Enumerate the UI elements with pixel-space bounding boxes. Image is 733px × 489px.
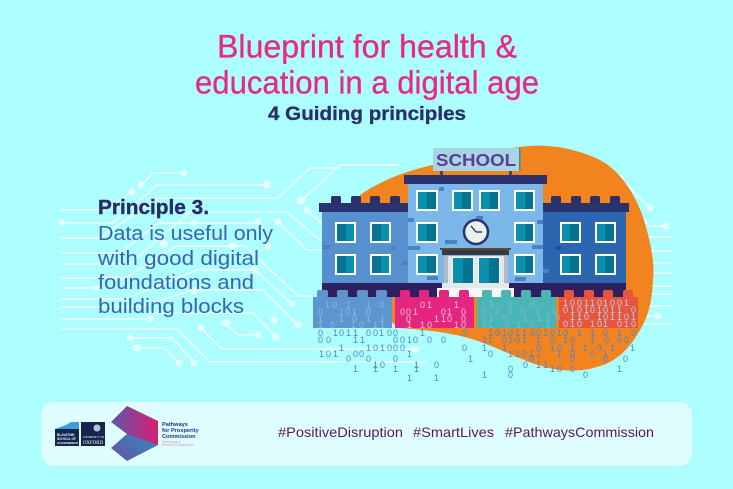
binary digits inside blocks: 110101101 — [570, 312, 636, 322]
principle text block: with good digital — [97, 248, 259, 270]
principle text block: Principle 3. — [98, 197, 209, 219]
logo: blavatnik school: GOVERNMENT — [57, 441, 79, 445]
binary digits inside blocks: 001010 — [400, 307, 466, 317]
logo: blavatnik school — [55, 422, 79, 446]
dark foundation — [322, 283, 626, 297]
school sign: SCHOOL — [436, 150, 516, 170]
logo: university of oxford — [81, 422, 105, 446]
binary digits inside blocks: 100 — [489, 299, 535, 309]
logo: pathways commission mark — [111, 406, 158, 461]
logo: pathways wordmark: Inclusive Development — [162, 443, 194, 447]
illustration: school building — [319, 148, 629, 297]
binary digits dissolving from blocks: 01011001001010101100101011010 — [318, 328, 636, 338]
binary digits dissolving from blocks: 00010000 — [346, 354, 628, 364]
binary digits dissolving from blocks: 0110011 — [373, 360, 548, 370]
hashtags: #PositiveDisruption — [278, 424, 403, 440]
logo: blavatnik school: BLAVATNIK — [57, 433, 75, 437]
left wing — [319, 203, 409, 284]
illustration: building blocks — [313, 290, 638, 328]
binary digits inside blocks: 010101010 — [563, 319, 636, 329]
logo: pathways wordmark — [162, 422, 200, 447]
hashtags: #PathwaysCommission — [505, 424, 654, 440]
circuit board background lines — [61, 165, 672, 363]
footer panel — [41, 402, 692, 466]
title: Blueprint for health & — [217, 28, 517, 64]
roof studs — [331, 196, 620, 204]
block: pink — [395, 290, 474, 328]
binary digits inside blocks: 10110 — [325, 300, 384, 310]
entrance portico — [437, 248, 514, 297]
hashtags — [278, 424, 654, 440]
block: blue — [313, 290, 392, 328]
logo: pathways wordmark: Commission — [162, 434, 196, 440]
block: red — [559, 290, 638, 328]
binary digits inside blocks: 0101010110 — [563, 305, 636, 315]
principle text block: Data is useful only — [98, 223, 273, 245]
binary digits dissolving from blocks: 11 — [407, 373, 439, 383]
logo: pathways wordmark: Technology & — [162, 440, 182, 444]
centre block — [404, 175, 547, 284]
binary digits dissolving from blocks: 111101001 — [353, 364, 622, 374]
binary digits inside blocks: 01010 — [318, 307, 371, 317]
binary digits inside blocks: 11011 — [318, 314, 385, 324]
hashtags: #SmartLives — [413, 424, 494, 440]
binary digits dissolving from blocks — [318, 328, 636, 383]
bricks — [322, 187, 561, 281]
logo: pathways wordmark: Pathways — [162, 422, 188, 428]
binary digits inside blocks — [318, 298, 636, 330]
windows — [335, 190, 616, 275]
title — [195, 28, 539, 100]
logo: university of oxford: UNIVERSITY OF — [83, 435, 105, 439]
logo: pathways wordmark: for Prosperity — [162, 428, 200, 434]
binary digits dissolving from blocks: 001100100011010110101000 — [318, 335, 629, 345]
binary digits inside blocks: 11010 — [407, 320, 466, 330]
principle text block: foundations and — [98, 272, 254, 294]
binary digits dissolving from blocks: 1010010110111001 — [319, 349, 608, 359]
binary digits dissolving from blocks: 110100001101011011 — [339, 343, 635, 353]
right wing — [543, 203, 629, 284]
principle text block — [97, 197, 273, 318]
binary digits inside blocks: 1001101001 — [563, 298, 629, 308]
logo: university of oxford: OXFORD — [83, 440, 103, 446]
title: education in a digital age — [195, 64, 539, 100]
principle text block: building blocks — [98, 296, 244, 318]
block: teal — [477, 290, 556, 328]
binary digits dissolving from blocks: 100 — [482, 370, 588, 380]
school sign — [433, 148, 520, 176]
subtitle: 4 Guiding principles — [268, 104, 466, 125]
binary digits inside blocks: 010101 — [482, 320, 550, 330]
clock — [464, 220, 488, 244]
binary digits inside blocks: 011010 — [482, 306, 557, 316]
binary digits inside blocks: 101011 — [318, 320, 385, 330]
binary digits inside blocks: 011 — [420, 300, 459, 310]
binary digits inside blocks: 0101110 — [482, 313, 560, 323]
orange blob backdrop — [360, 146, 653, 371]
binary digits inside blocks: 01100 — [406, 314, 466, 324]
logo: blavatnik school: SCHOOL OF — [57, 437, 76, 441]
